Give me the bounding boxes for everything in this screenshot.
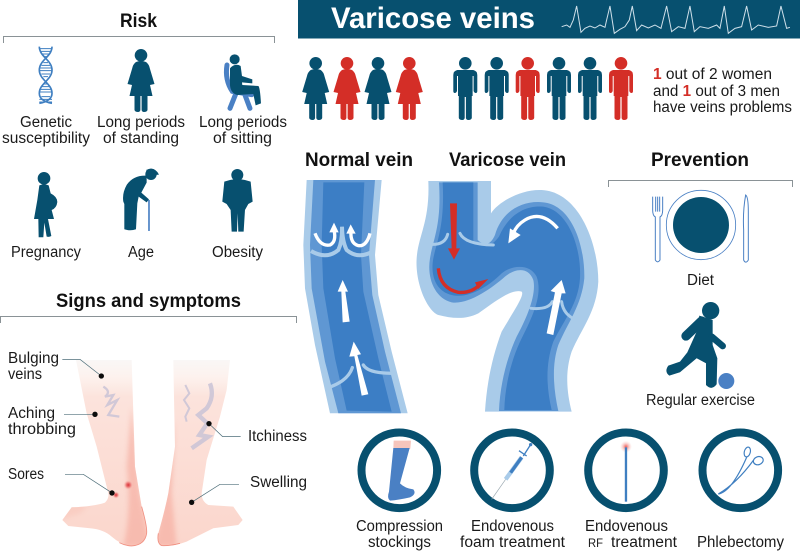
- label: obesity: Obesity: [212, 244, 263, 261]
- treatment: phlebectomy: Phlebectomy: [697, 534, 784, 551]
- panel: signs and symptoms: [0, 291, 307, 547]
- diagram: varicose vein: [417, 181, 598, 412]
- heading: prevention: Prevention: [651, 150, 749, 171]
- label: aching throbbing: Aching: [8, 405, 55, 422]
- valves: [311, 227, 374, 255]
- treatment: endovenous RF: [585, 432, 678, 551]
- treatment: compression stockings: Compression: [356, 518, 443, 535]
- diagram: normal vein: [303, 180, 408, 413]
- statistic: women figures: [302, 57, 423, 120]
- icon: heartbeat line: [562, 6, 790, 33]
- statistic text: [653, 66, 792, 116]
- heading: normal vein: Normal vein: [305, 150, 413, 171]
- heading: Risk: Risk: [120, 11, 157, 32]
- treatment: endovenous RF: Endovenous: [585, 518, 668, 535]
- treatment: compression stockings: [356, 432, 443, 551]
- panel: risk: [2, 11, 287, 261]
- label: genetic susceptibility: susceptibility: [2, 130, 90, 147]
- treatment: endovenous foam: Endovenous: [471, 518, 554, 535]
- icon: person kicking ball: [666, 302, 734, 389]
- icon: obese person: [222, 169, 253, 232]
- label: genetic susceptibility: [2, 114, 90, 147]
- icon: DNA helix: [39, 47, 52, 103]
- statistic text: have veins problems: [653, 99, 792, 116]
- arrows: [448, 203, 460, 260]
- label: diet: Diet: [687, 272, 715, 289]
- treatment: phlebectomy: [697, 432, 784, 551]
- label: sores: Sores: [8, 466, 44, 483]
- treatment: endovenous RF: treatment: [611, 534, 678, 551]
- treatment: endovenous foam: foam treatment: [460, 534, 566, 551]
- label: pregnancy: Pregnancy: [11, 244, 81, 261]
- label: age: Age: [128, 244, 154, 261]
- panel: treatments: [356, 432, 784, 551]
- header banner: [298, 0, 800, 38]
- heading: signs and symptoms: Signs and symptoms: [56, 291, 241, 312]
- label: long periods of sitting: Long periods: [199, 114, 287, 131]
- icon: RF catheter: [620, 441, 632, 502]
- label: bulging veins: [8, 350, 59, 383]
- statistic text: and 1 out of 3 men: [653, 83, 780, 100]
- icon: syringe: [492, 443, 532, 499]
- label: swelling: Swelling: [250, 474, 307, 491]
- label: aching throbbing: throbbing: [8, 421, 76, 438]
- treatment: compression stockings: stockings: [368, 534, 431, 551]
- arrows: [315, 230, 370, 246]
- illustration: legs: [60, 359, 243, 547]
- icon: standing woman: [128, 49, 154, 112]
- icon: stocking: [388, 441, 415, 501]
- icon: pregnant woman: [34, 172, 57, 237]
- icon: person sitting on chair: [226, 54, 261, 108]
- label: long periods of standing: of standing: [103, 130, 179, 147]
- label: genetic susceptibility: Genetic: [20, 114, 72, 131]
- label: long periods of standing: Long periods: [97, 114, 185, 131]
- label: long periods of standing: [97, 114, 185, 147]
- panel: prevention: [608, 150, 792, 409]
- icon: forceps: [718, 446, 764, 494]
- icon: plate and cutlery: [653, 190, 748, 262]
- statistic: men figures: [453, 57, 633, 120]
- label: bulging veins: veins: [8, 366, 42, 383]
- valves: [431, 233, 493, 245]
- heading: varicose vein: Varicose vein: [449, 150, 566, 171]
- label: regular exercise: Regular exercise: [646, 392, 755, 409]
- label: bulging veins: Bulging: [8, 350, 59, 367]
- label: long periods of sitting: [199, 114, 287, 147]
- title: Varicose veins: [331, 2, 535, 35]
- icon: elderly person with cane: [123, 169, 159, 231]
- label: aching throbbing: [8, 405, 76, 438]
- label: long periods of sitting: of sitting: [213, 130, 272, 147]
- treatment: endovenous RF: RF: [588, 536, 603, 550]
- treatment: endovenous foam: [460, 432, 566, 551]
- statistic text: 1 out of 2 women: [653, 66, 772, 83]
- label: itchiness: Itchiness: [248, 428, 307, 445]
